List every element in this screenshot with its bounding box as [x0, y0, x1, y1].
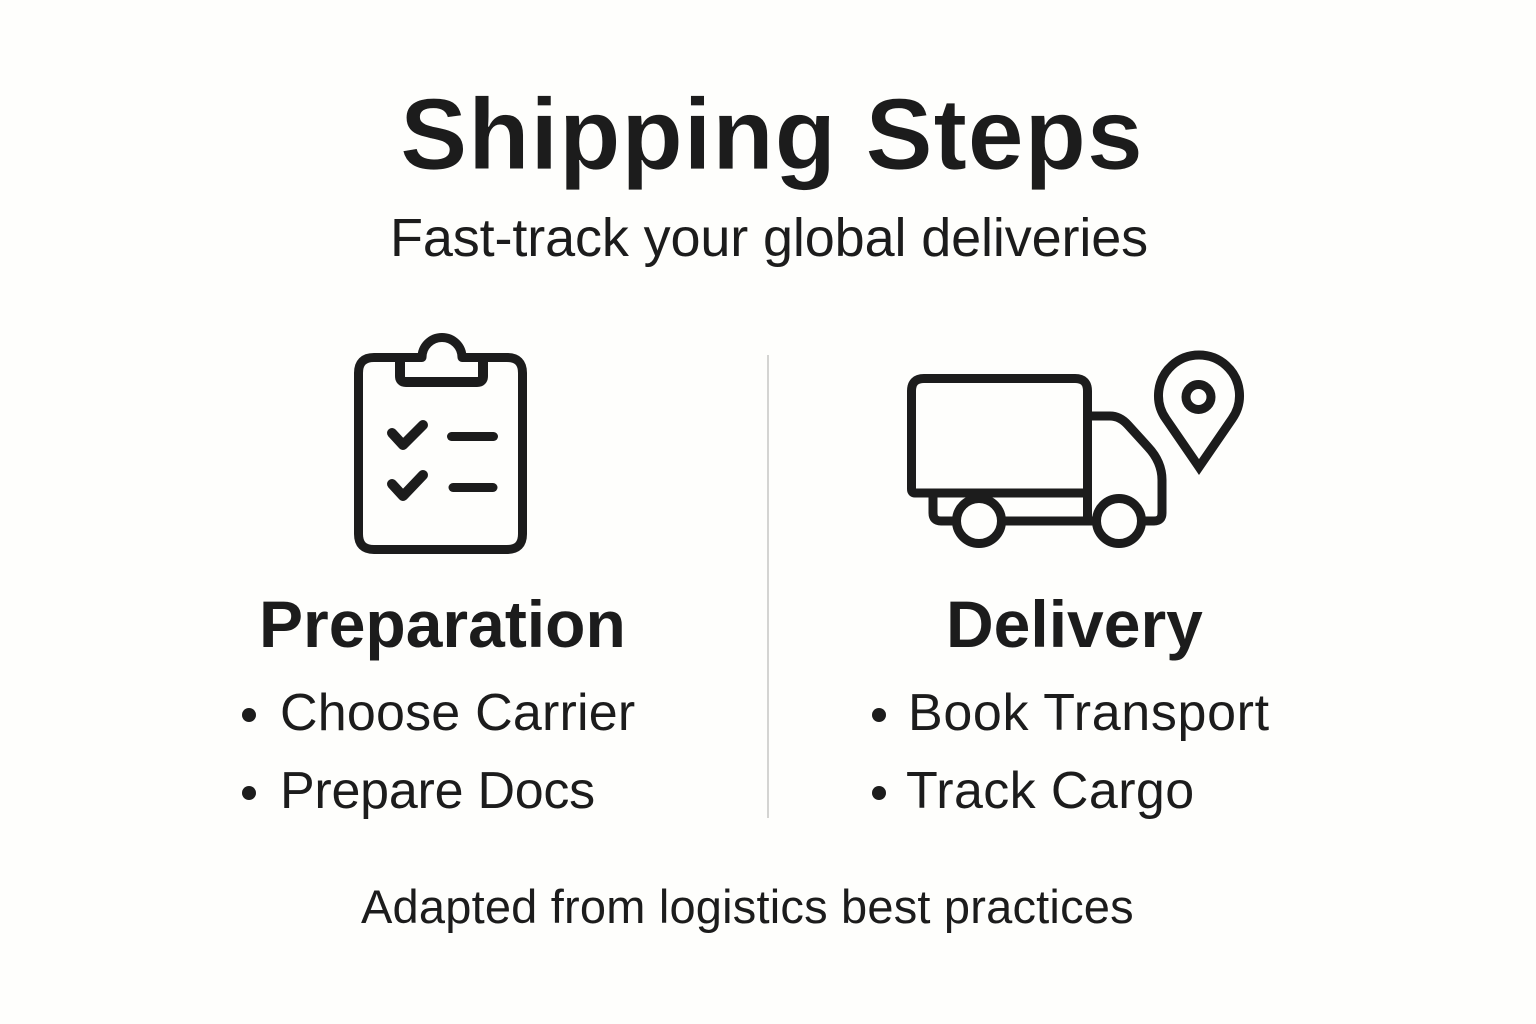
- bullet 4: [872, 786, 886, 800]
- item: choose carrier: Choose Carrier: [280, 684, 635, 742]
- heading: delivery: Delivery: [946, 587, 1203, 661]
- subtitle: Fast-track your global deliveries: [390, 208, 1148, 268]
- item: book transport: Book Transport: [908, 684, 1270, 742]
- footer note: Adapted from logistics best practices: [361, 880, 1134, 933]
- divider: [767, 355, 769, 818]
- list: delivery steps: [872, 684, 1270, 820]
- bullet 1: [242, 708, 256, 722]
- heading: preparation: Preparation: [259, 587, 626, 661]
- bullet 2: [242, 786, 256, 800]
- bullet 3: [872, 708, 886, 722]
- title: Shipping Steps: [400, 79, 1143, 191]
- list: preparation steps: [242, 684, 635, 820]
- item: prepare docs: Prepare Docs: [280, 762, 595, 820]
- item: track cargo: Track Cargo: [906, 762, 1195, 820]
